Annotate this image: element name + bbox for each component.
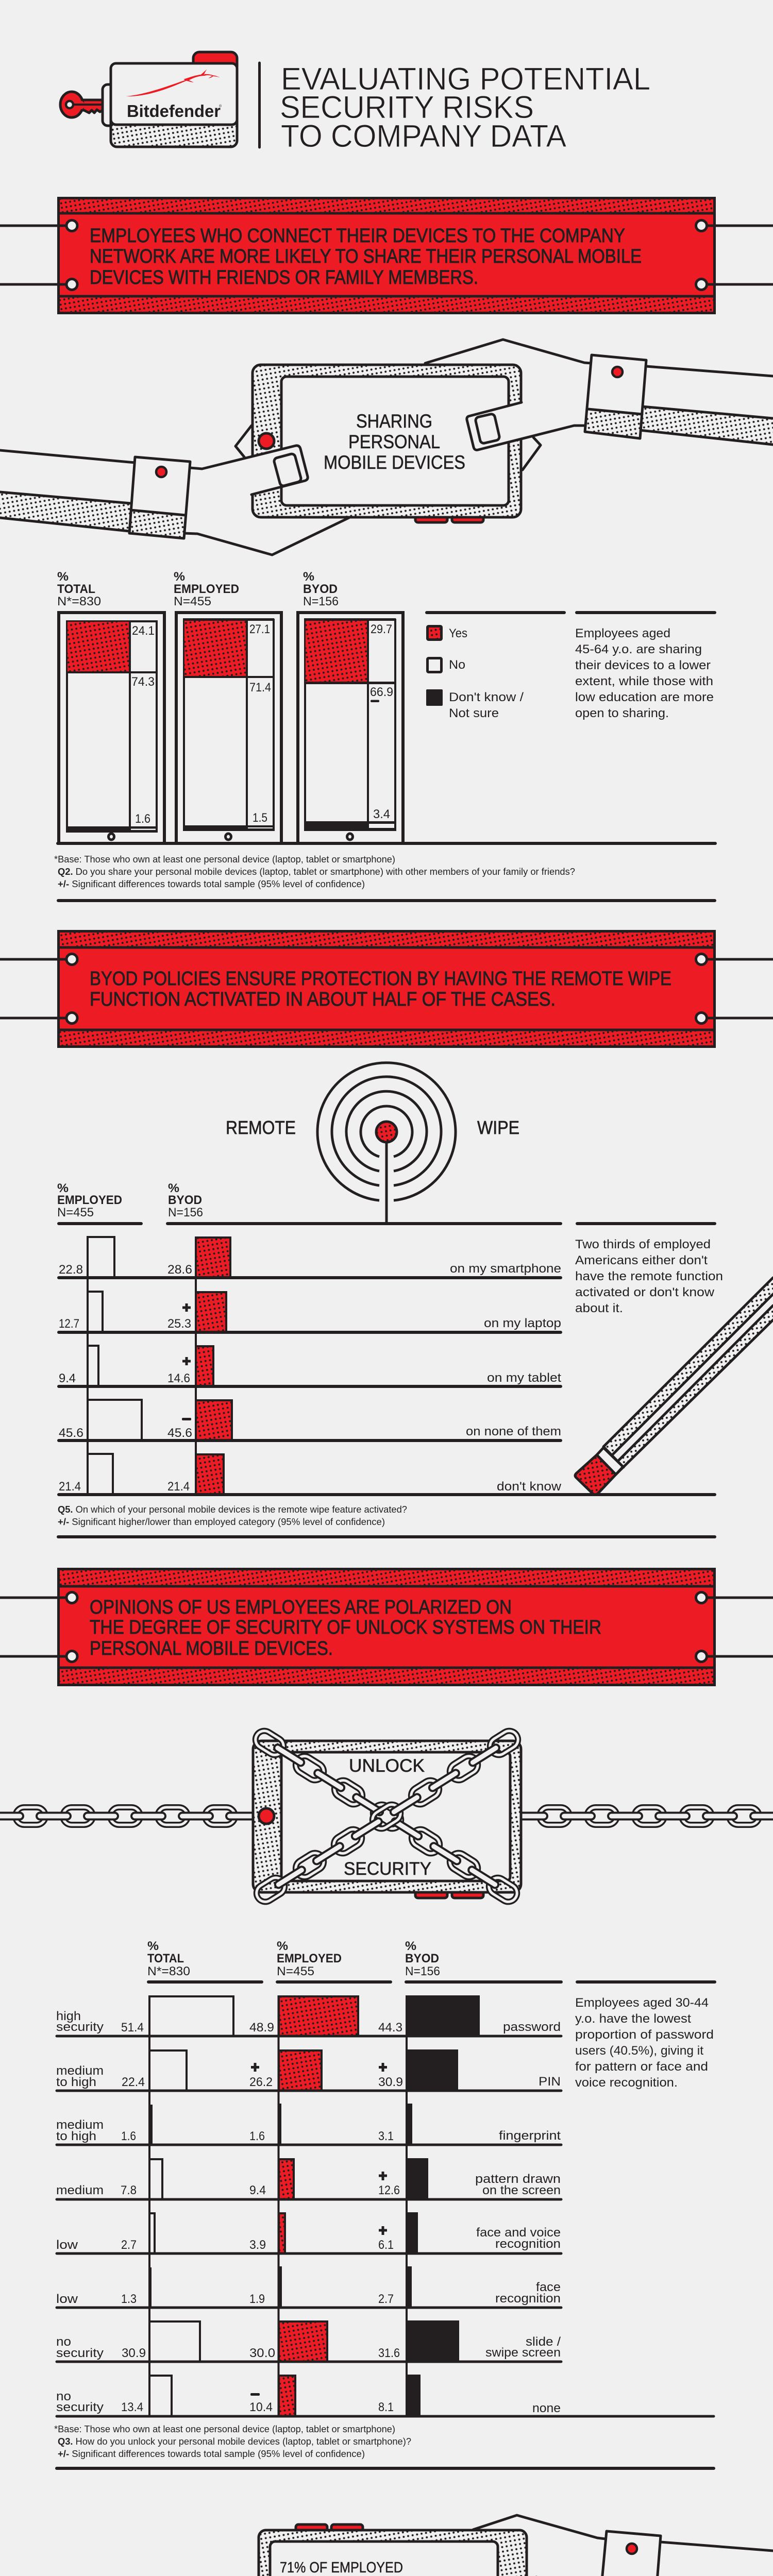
bar: employed <box>183 618 274 840</box>
values: 12.7 <box>59 1317 79 1331</box>
note: age 45-64: low education are more <box>575 690 714 704</box>
footnotes: *Base: Those who own at least one personal device (laptop, tablet or smartphone) <box>54 854 395 865</box>
column headers: N=156 <box>405 1964 440 1978</box>
values: 2.7 <box>378 2292 394 2306</box>
bar: byod <box>304 618 396 840</box>
column headers: % <box>277 1939 288 1953</box>
unlock method labels: password <box>503 2020 561 2034</box>
values: 1.6 <box>249 2129 265 2143</box>
unlock method labels: none <box>532 2401 561 2415</box>
note: age 45-64: Employees aged <box>575 626 670 640</box>
column headers: % <box>405 1939 416 1953</box>
values: 7.8 <box>121 2183 137 2197</box>
values: 10.4 <box>249 2400 273 2414</box>
banner: byod policies <box>0 931 773 1047</box>
illustration: two hands sharing a device <box>0 340 773 555</box>
values: 14.6 <box>167 1371 190 1385</box>
note: age 45-64: their devices to a lower <box>575 658 711 672</box>
note: two thirds <box>575 1238 723 1315</box>
column headers: N=455 <box>277 1964 314 1978</box>
column headers: BYOD <box>405 1952 439 1965</box>
column headers: N=455 <box>174 595 211 608</box>
security level labels: to high <box>56 2075 96 2089</box>
category labels: don't know <box>497 1480 562 1494</box>
column headers: EMPLOYED <box>277 1952 342 1965</box>
bars: employed <box>88 1237 142 1495</box>
column headers: % <box>57 1181 69 1195</box>
security level labels <box>56 2009 104 2414</box>
column headers: N*=830 <box>57 595 101 608</box>
bar: byod: 66.9 <box>370 685 393 699</box>
column headers: N=156 <box>168 1206 203 1219</box>
note: age 30-44: users (40.5%), giving it <box>575 2044 703 2058</box>
security level labels: medium <box>56 2183 104 2197</box>
banner: employees who connect: NETWORK ARE MORE LIKELY TO SHARE THEIR PERSONAL MOBILE <box>90 246 642 267</box>
security level labels: no <box>56 2389 71 2403</box>
bars: total <box>149 1996 233 2416</box>
values: 9.4 <box>249 2183 266 2197</box>
column headers: % <box>168 1181 179 1195</box>
values: 22.8 <box>59 1263 83 1277</box>
icon: key in locked tablet logo: ® <box>219 104 222 108</box>
callout: 71% of employed americans <box>259 2515 773 2576</box>
chart: remote wipe by device <box>57 1181 773 1537</box>
bars: byod <box>196 1238 232 1495</box>
banner: employees who connect: DEVICES WITH FRIENDS OR FAMILY MEMBERS. <box>90 267 478 289</box>
bar: total <box>66 621 157 840</box>
values: 9.4 <box>59 1371 76 1385</box>
device screen with text: SHARING <box>356 411 432 432</box>
bars: employed <box>278 1996 358 2416</box>
unlock method labels: pattern drawn <box>475 2172 561 2186</box>
values: 6.1 <box>378 2238 394 2252</box>
values: 45.6 <box>167 1426 192 1440</box>
values: 48.9 <box>249 2021 274 2035</box>
icon: remote wipe antenna with label <box>226 1063 519 1224</box>
category labels <box>450 1262 562 1494</box>
device screen with text <box>253 365 521 517</box>
device screen with text: UNLOCK <box>349 1756 425 1776</box>
note: age 45-64: open to sharing. <box>575 706 669 720</box>
column headers: BYOD <box>303 582 338 596</box>
device screen with text <box>253 1741 521 1892</box>
note: age 30-44 <box>575 1996 714 2090</box>
note: age 30-44: y.o. have the lowest <box>575 2012 691 2026</box>
column headers: TOTAL <box>57 582 95 596</box>
category labels: on my laptop <box>484 1316 561 1330</box>
values: 1.6 <box>121 2129 136 2143</box>
column headers: BYOD <box>168 1193 202 1207</box>
legend <box>426 613 564 720</box>
values: 1.3 <box>121 2292 137 2306</box>
category labels: on my tablet <box>487 1371 561 1385</box>
values: 22.4 <box>122 2075 145 2089</box>
note: two thirds: about it. <box>575 1301 623 1315</box>
note: age 30-44: proportion of password <box>575 2028 714 2042</box>
unlock method labels: recognition <box>495 2292 561 2306</box>
note: two thirds: have the remote function <box>575 1269 723 1283</box>
icon: remote wipe antenna with label: WIPE <box>477 1117 519 1138</box>
device screen with text <box>259 2530 527 2576</box>
values: 8.1 <box>378 2400 394 2414</box>
title: TO COMPANY DATA <box>281 118 566 154</box>
footnotes: +/- Significant higher/lower than employed category (95% level of confidence) <box>58 1517 385 1527</box>
icon: key in locked tablet logo <box>60 52 237 147</box>
bar: total: 24.1 <box>132 624 155 638</box>
column headers <box>147 1939 440 1978</box>
banner: employees who connect: EMPLOYEES WHO CONNECT THEIR DEVICES TO THE COMPANY <box>90 225 625 247</box>
chart: sharing devices, stacked bars in phones <box>54 570 715 901</box>
values: 26.2 <box>249 2075 273 2089</box>
values: 12.6 <box>378 2183 400 2197</box>
title: EVALUATING POTENTIAL <box>281 61 650 96</box>
title <box>280 61 650 154</box>
values <box>59 1263 192 1494</box>
security level labels: medium <box>56 2118 104 2132</box>
note: age 45-64: 45-64 y.o. are sharing <box>575 642 702 656</box>
security level labels: low <box>56 2238 78 2252</box>
values: 21.4 <box>167 1480 190 1494</box>
values: 44.3 <box>378 2021 402 2035</box>
security level labels: no <box>56 2335 71 2349</box>
unlock method labels: face <box>536 2280 561 2294</box>
note: two thirds: Two thirds of employed <box>575 1238 711 1251</box>
footnotes: +/- Significant differences towards total sample (95% level of confidence) <box>58 879 365 889</box>
note: two thirds: Americans either don't <box>575 1253 708 1267</box>
values: 13.4 <box>121 2400 143 2414</box>
column headers: % <box>57 570 69 584</box>
device screen with text: SECURITY <box>344 1859 431 1879</box>
illustration: chained device unlock security <box>0 1727 773 1905</box>
values: 21.4 <box>59 1480 81 1494</box>
unlock method labels: PIN <box>539 2075 561 2089</box>
column headers: N=156 <box>303 595 339 608</box>
legend: Not sure <box>449 706 499 720</box>
note: age 30-44: voice recognition. <box>575 2076 678 2090</box>
security level labels: low <box>56 2292 78 2306</box>
bar: total: 74.3 <box>131 675 155 689</box>
note: two thirds: activated or don't know <box>575 1285 715 1299</box>
unlock method labels: on the screen <box>482 2183 561 2197</box>
security level labels: security <box>56 2020 104 2034</box>
note: age 45-64 <box>575 613 715 720</box>
security level labels: security <box>56 2346 104 2360</box>
hand holding device <box>482 2531 773 2576</box>
column headers: % <box>303 570 314 584</box>
unlock method labels: fingerprint <box>499 2129 561 2143</box>
bar: employed: 1.5 <box>253 811 267 825</box>
bar: byod: 3.4 <box>373 807 390 821</box>
bars: byod <box>406 1995 480 2416</box>
column headers: EMPLOYED <box>57 1193 122 1207</box>
footnotes: +/- Significant differences towards total sample (95% level of confidence) <box>58 2449 365 2459</box>
unlock method labels <box>475 2020 561 2415</box>
values: 1.9 <box>249 2292 265 2306</box>
bar: total: 1.6 <box>135 812 150 826</box>
security level labels: security <box>56 2400 104 2414</box>
legend: Yes <box>449 626 467 640</box>
values: 3.1 <box>378 2129 394 2143</box>
footnotes <box>58 1504 407 1527</box>
column headers <box>57 1181 203 1219</box>
column headers: N*=830 <box>147 1964 190 1978</box>
footnotes <box>54 2424 411 2459</box>
note: age 45-64: extent, while those with <box>575 674 713 688</box>
footnotes: *Base: Those who own at least one personal device (laptop, tablet or smartphone) <box>54 2424 395 2434</box>
values: 31.6 <box>378 2346 400 2360</box>
security level labels: medium <box>56 2064 104 2078</box>
unlock method labels: face and voice <box>476 2226 561 2240</box>
footnotes <box>54 854 575 889</box>
column headers: EMPLOYED <box>174 582 239 596</box>
banner: opinions polarized: OPINIONS OF US EMPLOYEES ARE POLARIZED ON <box>90 1597 512 1618</box>
banner: opinions polarized <box>0 1569 773 1685</box>
security level labels: to high <box>56 2129 96 2143</box>
chain: right <box>513 1807 773 1825</box>
unlock method labels: swipe screen <box>485 2346 561 2360</box>
column headers: N=455 <box>57 1206 94 1219</box>
category labels: on none of them <box>466 1425 561 1438</box>
icon: remote wipe antenna with label: REMOTE <box>226 1117 296 1138</box>
bar: employed: 27.1 <box>249 622 270 636</box>
icon: pencil <box>575 1278 773 1495</box>
unlock method labels: recognition <box>495 2237 561 2251</box>
note: age 30-44: for pattern or face and <box>575 2060 708 2074</box>
column headers: % <box>174 570 185 584</box>
chart: unlock systems by security <box>54 1939 715 2468</box>
values: 3.9 <box>249 2238 266 2252</box>
note: age 30-44: Employees aged 30-44 <box>575 1996 709 2010</box>
column headers: % <box>147 1939 159 1953</box>
values: 30.9 <box>378 2075 403 2089</box>
banner: byod policies: BYOD POLICIES ENSURE PROTECTION BY HAVING THE REMOTE WIPE <box>90 968 671 990</box>
values: 28.6 <box>167 1263 192 1277</box>
legend: No <box>449 658 465 672</box>
right hand <box>467 355 773 450</box>
bar: byod: 29.7 <box>371 622 392 636</box>
values: 45.6 <box>59 1426 83 1440</box>
icon: key in locked tablet logo: Bitdefender <box>127 101 221 121</box>
legend: Don't know / <box>449 690 524 704</box>
security level labels: high <box>56 2009 81 2023</box>
title: SECURITY RISKS <box>280 90 534 125</box>
values: 25.3 <box>167 1317 191 1331</box>
column headers <box>57 570 339 608</box>
device screen with text: 71% OF EMPLOYED <box>280 2560 403 2576</box>
category labels: on my smartphone <box>450 1262 561 1276</box>
banner: byod policies: FUNCTION ACTIVATED IN ABOUT HALF OF THE CASES. <box>90 989 556 1010</box>
bar: employed: 71.4 <box>249 681 271 694</box>
values: 2.7 <box>121 2238 137 2252</box>
banner: opinions polarized: PERSONAL MOBILE DEVICES. <box>90 1638 333 1659</box>
left hand <box>0 445 308 538</box>
header: logo and title <box>60 52 650 154</box>
footnotes: Q3. How do you unlock your personal mobile devices (laptop, tablet or smartphone)? <box>58 2436 411 2447</box>
unlock method labels: slide / <box>526 2335 561 2349</box>
values <box>121 2021 403 2414</box>
device screen with text: MOBILE DEVICES <box>324 452 465 473</box>
values: 30.9 <box>122 2346 146 2360</box>
chain: crossed diagonals <box>252 1727 522 1905</box>
chain: left <box>0 1807 260 1825</box>
column headers: TOTAL <box>147 1952 184 1965</box>
values: 51.4 <box>121 2021 144 2035</box>
device screen with text: PERSONAL <box>348 431 440 452</box>
values: 30.0 <box>249 2346 275 2360</box>
footnotes: Q2. Do you share your personal mobile devices (laptop, tablet or smartphone) with other members of your family or friends? <box>58 867 575 877</box>
banner: opinions polarized: THE DEGREE OF SECURITY OF UNLOCK SYSTEMS ON THEIR <box>90 1617 601 1638</box>
banner: employees who connect <box>0 198 773 313</box>
footnotes: Q5. On which of your personal mobile devices is the remote wipe feature activated? <box>58 1504 407 1515</box>
